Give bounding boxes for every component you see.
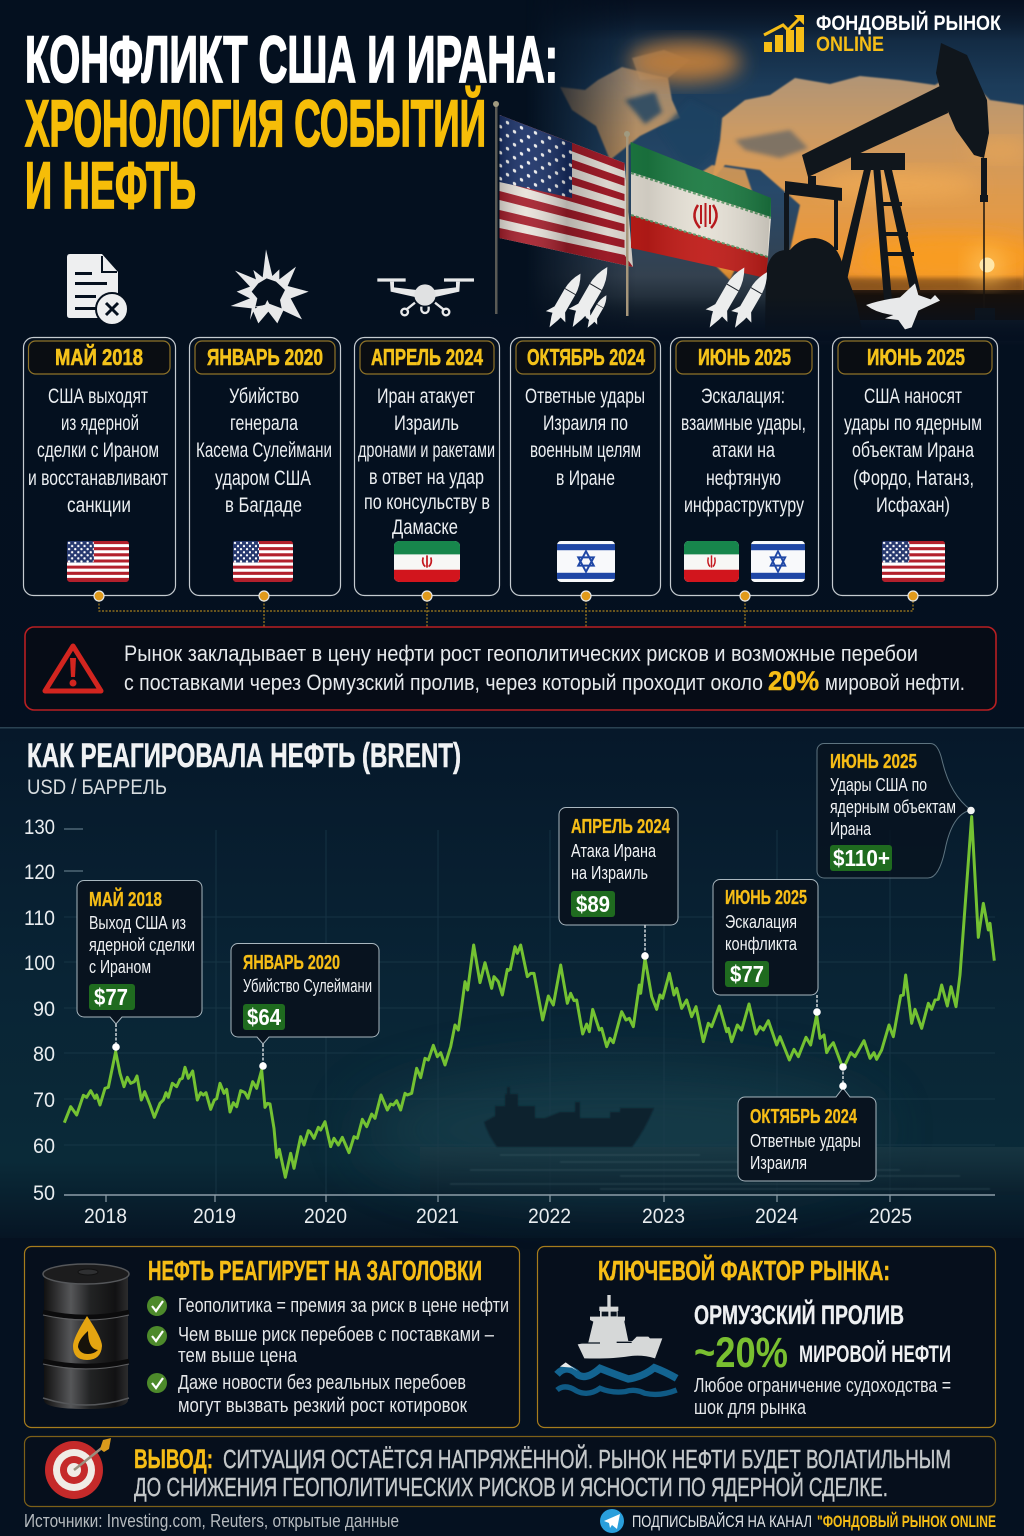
chart heading	[27, 737, 461, 799]
card: June 2025 escalation: нефтяную	[706, 467, 781, 490]
world map	[560, 50, 1024, 300]
card: October 2024	[510, 338, 660, 596]
callout: January 2020: Убийство Сулеймани	[243, 975, 372, 996]
card: May 2018: и восстанавливают	[28, 467, 168, 490]
callout: June 2025 escalation: $77	[730, 961, 764, 987]
title: ХРОНОЛОГИЯ СОБЫТИЙ	[25, 85, 486, 160]
price line: Brent	[64, 817, 994, 1177]
icon: drone	[377, 278, 474, 315]
callout: April 2024: Атака Ирана	[571, 840, 657, 861]
check item 3	[147, 1372, 467, 1417]
icon: target	[45, 1438, 111, 1499]
callout: May 2018: ядерной сделки	[89, 934, 195, 955]
card: October 2024: военным целям	[530, 439, 641, 462]
callout: June 2025 strikes: ядерным объектам	[830, 796, 956, 817]
panel: key factor: КЛЮЧЕВОЙ ФАКТОР РЫНКА:	[598, 1254, 890, 1286]
card: April 2024	[354, 338, 500, 596]
card: January 2020	[190, 338, 340, 596]
callout: May 2018: Выход США из	[89, 912, 186, 933]
x axis: 2021	[416, 1205, 459, 1228]
card: October 2024: ОКТЯБРЬ 2024	[527, 344, 645, 370]
card: April 2024: АПРЕЛЬ 2024	[371, 344, 483, 370]
card: April 2024: Дамаске	[392, 516, 458, 539]
callout: June 2025 strikes: Удары США по	[830, 774, 927, 795]
title: И НЕФТЬ	[25, 148, 196, 222]
y axis: 110	[24, 907, 55, 930]
x axis: 2024	[755, 1205, 798, 1228]
chart heading: КАК РЕАГИРОВАЛА НЕФТЬ (BRENT)	[27, 737, 461, 775]
card: January 2020: генерала	[230, 412, 298, 435]
callout: October 2024: Ответные удары	[750, 1130, 861, 1151]
card: June 2025 strikes: (Фордо, Натанз,	[853, 467, 974, 490]
callout: January 2020: $64	[247, 1004, 281, 1030]
card: June 2025 strikes: ИЮНЬ 2025	[867, 344, 965, 370]
title	[25, 22, 558, 222]
card: May 2018: санкции	[67, 494, 131, 517]
alert panel	[25, 627, 996, 710]
alert panel: Рынок закладывает в цену нефти рост геополитических рисков и возможные перебои	[124, 641, 918, 666]
card: May 2018	[24, 338, 176, 596]
card: June 2025 strikes: Исфахан)	[876, 494, 950, 517]
x axis: 2022	[528, 1205, 571, 1228]
card: May 2018: США выходят	[48, 385, 148, 408]
alert panel: 20%	[768, 666, 819, 696]
timeline connectors	[94, 591, 918, 627]
callout: January 2020: ЯНВАРЬ 2020	[243, 952, 340, 974]
y axis: 70	[33, 1089, 55, 1112]
card: January 2020: ударом США	[215, 467, 311, 490]
y axis	[24, 816, 83, 1205]
card: June 2025 escalation: взаимные удары,	[681, 412, 806, 435]
callout: April 2024	[559, 808, 678, 960]
card: June 2025 escalation	[670, 338, 818, 596]
callout: April 2024: $89	[576, 891, 610, 917]
chart section background	[0, 727, 1024, 1238]
card: October 2024: Израиля по	[543, 412, 628, 435]
chart heading: USD / БАРРЕЛЬ	[27, 776, 167, 799]
card: January 2020: в Багдаде	[225, 494, 302, 517]
card: June 2025 escalation: Эскалация:	[701, 385, 785, 408]
card: June 2025 strikes: объектам Ирана	[852, 439, 974, 462]
callout: June 2025 strikes	[817, 743, 975, 878]
ship at sea backdrop	[420, 1087, 1024, 1195]
subscribe line	[600, 1509, 996, 1533]
pump jack	[765, 43, 995, 330]
y axis: 90	[33, 998, 55, 1021]
y axis: 80	[33, 1043, 55, 1066]
check item 2	[147, 1324, 495, 1367]
card: October 2024: в Иране	[556, 467, 615, 490]
card: April 2024: Израиль	[394, 412, 459, 435]
callout: June 2025 escalation	[713, 880, 821, 1016]
card: June 2025 escalation: ИЮНЬ 2025	[698, 344, 791, 370]
callout: June 2025 strikes: Ирана	[830, 818, 872, 839]
sources: Источники: Investing.com, Reuters, открытые данные	[24, 1511, 399, 1531]
card: April 2024: дронами и ракетами	[358, 439, 495, 462]
card: January 2020: ЯНВАРЬ 2020	[207, 344, 323, 370]
callout: May 2018: МАЙ 2018	[89, 887, 162, 911]
panel: key factor: ~20%	[694, 1329, 788, 1377]
callout: June 2025 escalation: Эскалация	[725, 911, 797, 932]
check item 3: Даже новости без реальных перебоев	[178, 1372, 466, 1394]
icon: document cancelled	[67, 254, 128, 325]
card: April 2024: Иран атакует	[377, 385, 475, 408]
icon: telegram	[600, 1509, 624, 1533]
callout: June 2025 strikes: $110+	[833, 845, 890, 871]
check item 2: Чем выше риск перебоев с поставками –	[178, 1324, 495, 1346]
x axis	[64, 1195, 995, 1228]
callout: May 2018: с Ираном	[89, 956, 151, 977]
flag: Iran	[624, 131, 771, 316]
icon: fighter jet	[866, 283, 940, 329]
hero image: flags and oil pump at sunset	[493, 13, 1024, 320]
title: КОНФЛИКТ США И ИРАНА:	[25, 22, 558, 96]
y axis: 130	[24, 816, 55, 839]
icon: missiles	[540, 261, 618, 333]
callout: June 2025 escalation: ИЮНЬ 2025	[725, 887, 807, 909]
card: April 2024: в ответ на удар	[369, 466, 484, 489]
y axis: 100	[24, 952, 55, 975]
x axis: 2019	[193, 1205, 236, 1228]
panel: headlines: НЕФТЬ РЕАГИРУЕТ НА ЗАГОЛОВКИ	[148, 1255, 482, 1286]
icon: explosion	[231, 249, 309, 323]
callout: January 2020	[231, 944, 379, 1070]
y axis: 120	[24, 861, 55, 884]
x axis: 2020	[304, 1205, 347, 1228]
callout: June 2025 strikes: ИЮНЬ 2025	[830, 751, 917, 773]
alert panel: мировой нефти.	[825, 670, 965, 695]
panel: conclusion: ВЫВОД:	[134, 1444, 213, 1474]
clouds	[629, 42, 741, 82]
logo	[764, 11, 1001, 56]
panel: key factor: МИРОВОЙ НЕФТИ	[799, 1340, 951, 1368]
callout: May 2018	[77, 880, 202, 1051]
card: April 2024: по консульству в	[364, 491, 490, 514]
callout: June 2025 escalation: конфликта	[725, 933, 798, 954]
card: May 2018: сделки с Ираном	[37, 439, 159, 462]
callout: May 2018: $77	[94, 984, 128, 1010]
callout: October 2024: ОКТЯБРЬ 2024	[750, 1106, 858, 1128]
callout: April 2024: АПРЕЛЬ 2024	[571, 816, 671, 838]
icon: tanker on waves	[557, 1295, 677, 1394]
x axis: 2023	[642, 1205, 685, 1228]
y axis: 50	[33, 1182, 55, 1205]
panel: key factor: ОРМУЗСКИЙ ПРОЛИВ	[694, 1299, 904, 1330]
card: May 2018: МАЙ 2018	[55, 343, 143, 370]
icon: oil barrel	[43, 1264, 129, 1409]
subscribe line: ПОДПИСЫВАЙСЯ НА КАНАЛ	[632, 1512, 812, 1531]
card: January 2020: Касема Сулеймани	[196, 439, 332, 462]
flag: USA	[493, 101, 633, 314]
y axis: 60	[33, 1135, 55, 1158]
card: June 2025 strikes: США наносят	[864, 385, 962, 408]
callout: October 2024	[738, 1063, 876, 1181]
alert panel: с поставками через Ормузский пролив, через который проходит около	[124, 670, 763, 695]
panel: headlines	[24, 1246, 520, 1428]
grid lines	[64, 830, 995, 1195]
check item 1: Геополитика = премия за риск в цене нефти	[178, 1295, 509, 1317]
panel: key factor	[538, 1246, 996, 1428]
panel: key factor: Любое ограничение судоходства =	[694, 1375, 951, 1397]
card: January 2020: Убийство	[229, 385, 299, 408]
check item 2: тем выше цена	[178, 1345, 298, 1367]
card: May 2018: из ядерной	[61, 412, 139, 435]
card: October 2024: Ответные удары	[525, 385, 645, 408]
callout: October 2024: Израиля	[750, 1152, 807, 1173]
check item 3: могут вызвать резкий рост котировок	[178, 1395, 467, 1417]
icon: missiles	[699, 261, 777, 334]
icon: warning triangle	[45, 646, 101, 691]
panel: key factor: шок для рынка	[694, 1397, 807, 1419]
logo: ONLINE	[816, 33, 884, 56]
card: June 2025 escalation: инфраструктуру	[684, 494, 804, 517]
x axis: 2025	[869, 1205, 912, 1228]
card: June 2025 strikes: удары по ядерным	[844, 412, 982, 435]
card: June 2025 strikes	[832, 338, 998, 596]
card: June 2025 escalation: атаки на	[712, 439, 775, 462]
panel: conclusion	[24, 1436, 996, 1506]
x axis: 2018	[84, 1205, 127, 1228]
callout: April 2024: на Израиль	[571, 862, 648, 883]
ocean gaps	[660, 110, 723, 152]
